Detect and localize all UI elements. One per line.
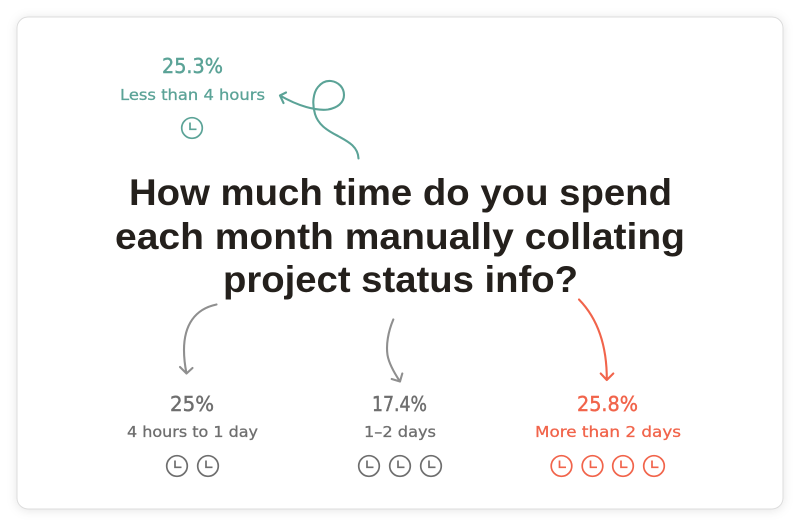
arrow: teal loop [280,81,358,158]
stat: more than 2 days: More than 2 days [535,423,681,441]
stat: less than 4 hours: Less than 4 hours [120,86,265,104]
stat: more than 2 days [535,392,681,476]
title [115,172,685,300]
title: each month manually collating [115,216,685,257]
stat: 1-2 days [359,392,441,476]
stat: less than 4 hours [120,54,265,138]
title: project status info? [223,259,578,300]
arrow: red [579,300,613,380]
stat: 4 hours to 1 day: 4 hours to 1 day [127,423,258,441]
stat: less than 4 hours: 25.3% [162,54,223,78]
title: How much time do you spend [129,172,672,213]
stat: more than 2 days: 25.8% [577,392,638,416]
stat: 4 hours to 1 day [127,392,258,476]
arrow: gray left [180,304,216,374]
stat: 1-2 days: 1–2 days [364,423,436,441]
arrow: gray middle [387,320,402,382]
stat: 1-2 days: 17.4% [372,392,427,416]
stat: 4 hours to 1 day: 25% [170,392,214,416]
